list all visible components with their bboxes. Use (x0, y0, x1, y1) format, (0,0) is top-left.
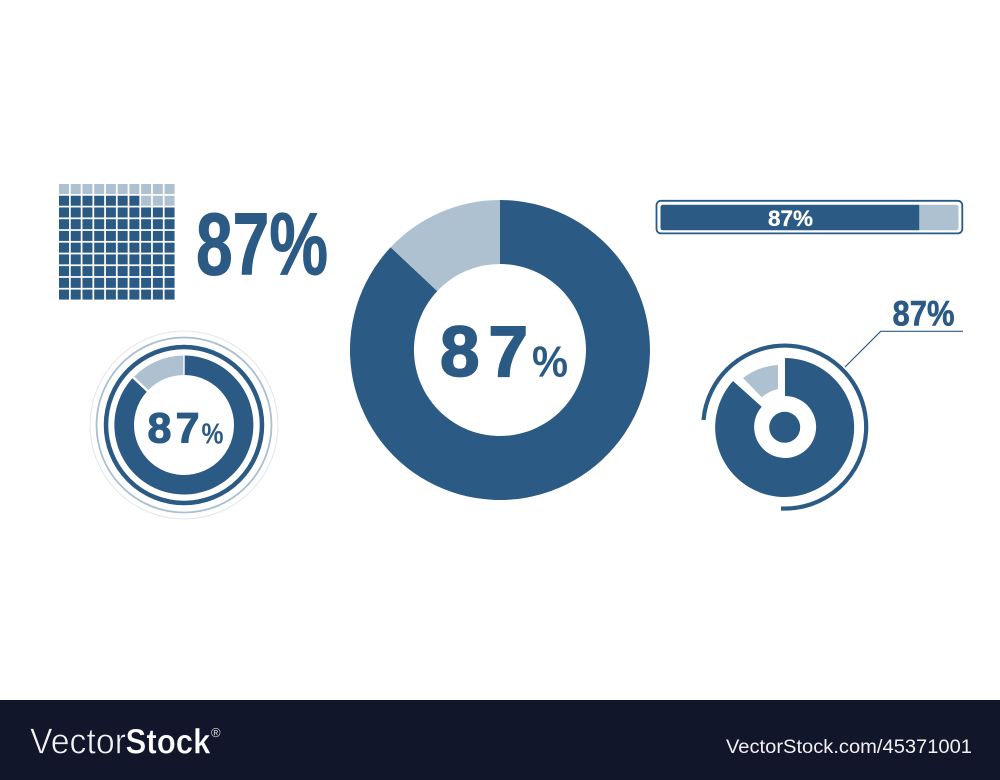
progress bar fill (660, 205, 919, 230)
waffle chart: 87 of 100 squares (59, 184, 175, 300)
right pie: centre dot (769, 412, 800, 443)
logo registered mark: ® (211, 725, 221, 740)
right pie chart with callout (704, 294, 963, 509)
left donut: 87% segment (114, 356, 253, 494)
footer background (0, 700, 1000, 780)
progress bar (656, 201, 962, 233)
progress bar frame (656, 201, 962, 233)
logo word: Stock: Stock (126, 722, 211, 762)
left ringed donut chart (90, 331, 278, 519)
left donut: remaining segment (134, 356, 183, 390)
footer logo (30, 720, 221, 762)
waffle value label: 87% (196, 194, 328, 294)
right pie: 87% segment (715, 358, 854, 497)
dark inner ring (106, 347, 262, 503)
footer image id: VectorStock.com/45371001 (726, 737, 972, 758)
centre donut chart (350, 200, 650, 500)
progress bar value: 87% (768, 206, 813, 231)
footer bar (0, 700, 1000, 780)
light middle ring (96, 338, 272, 512)
left donut: value: 87 (148, 404, 200, 452)
progress bar remaining (919, 205, 958, 230)
centre donut: value: 87 (440, 313, 528, 392)
right pie: remaining segment (743, 365, 778, 397)
faint outer ring (90, 331, 278, 519)
right pie: leader line (845, 331, 963, 367)
right pie: outer arc (704, 346, 866, 509)
logo word: Vector: Vector (30, 720, 126, 762)
centre donut: 87% segment (350, 200, 650, 500)
left donut: percent sign: % (202, 418, 224, 450)
centre donut: remaining segment (391, 200, 500, 291)
right pie: value: 87% (892, 294, 954, 334)
centre donut: percent sign: % (532, 338, 568, 386)
